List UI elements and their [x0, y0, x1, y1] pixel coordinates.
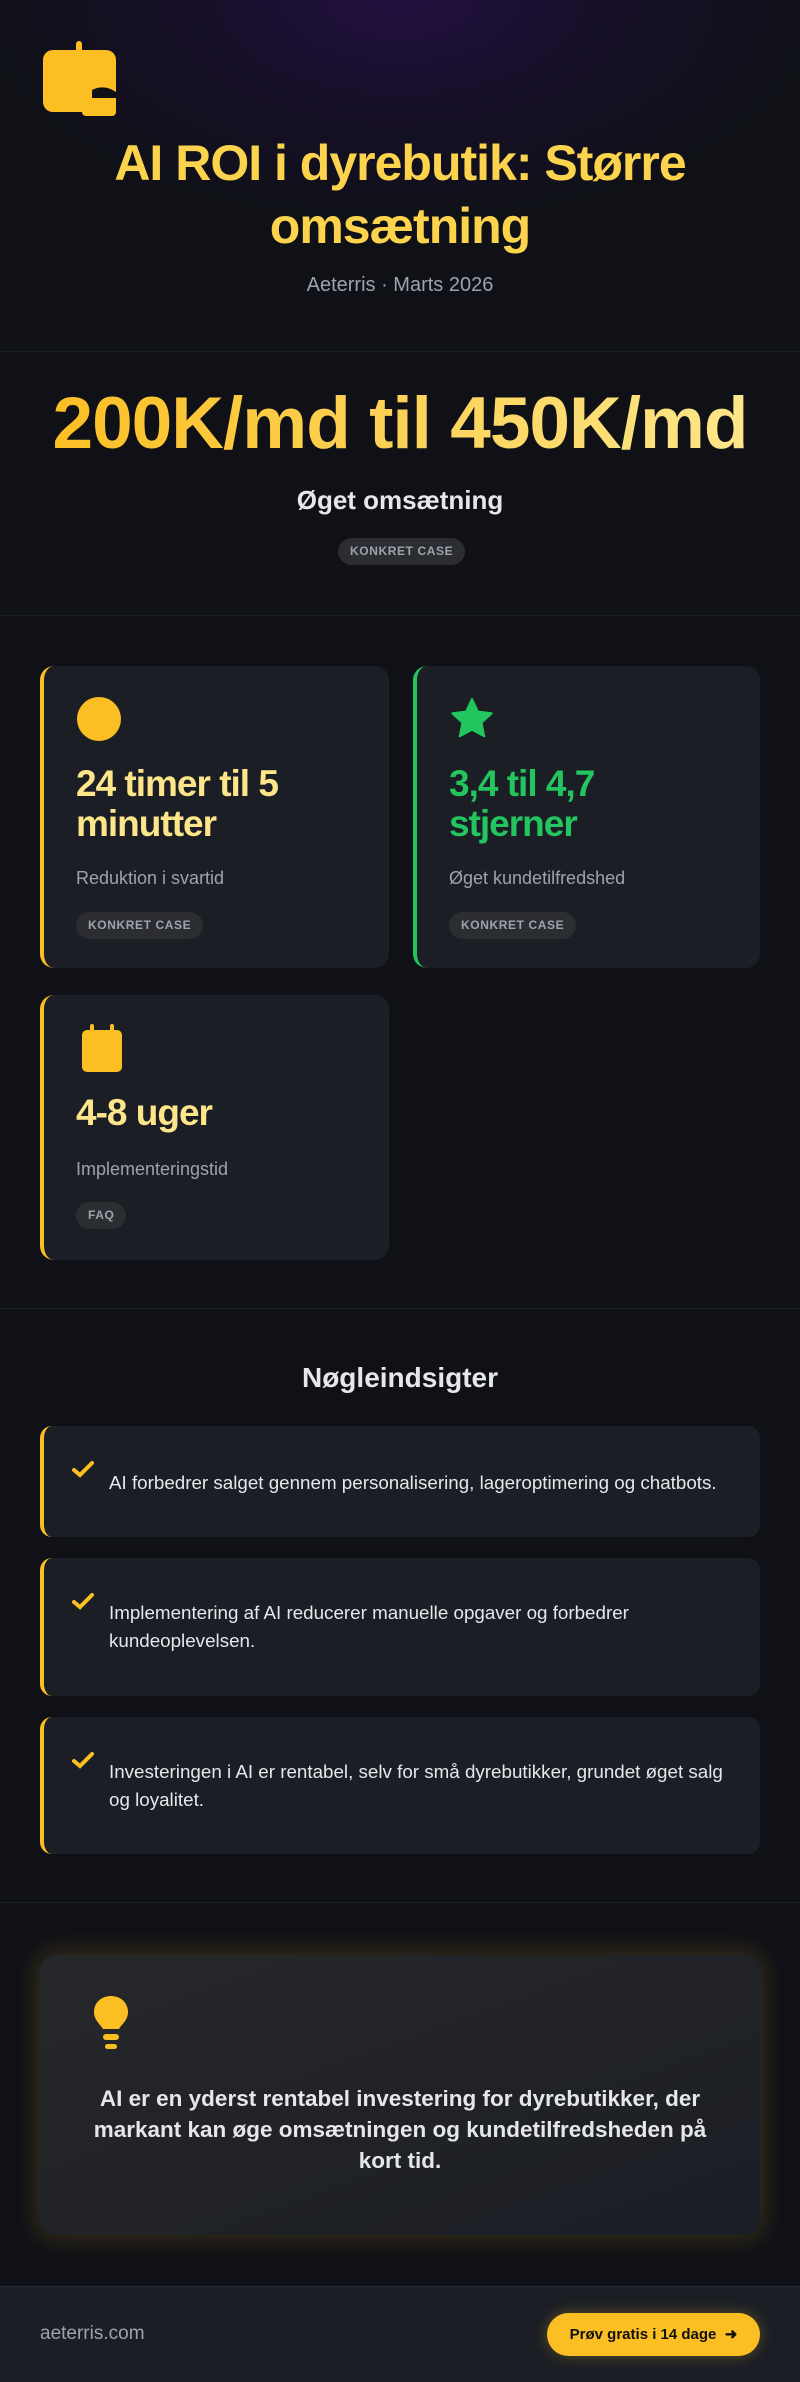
hero badge: [338, 538, 465, 565]
conclusion box: [40, 1955, 760, 2235]
card: response time: [40, 666, 389, 968]
value: [76, 763, 278, 844]
title: omsætning: [270, 198, 530, 254]
value: [449, 763, 594, 844]
badge: KONKRET CASE: [461, 918, 564, 932]
label: Reduktion i svartid: [76, 868, 224, 888]
insight 1: [40, 1426, 760, 1537]
insight 2: Implementering af AI reducerer manuelle opgaver og forbedrer kundeoplevelsen.: [109, 1602, 629, 1651]
card: satisfaction: [413, 666, 760, 968]
icon: check: [72, 1752, 94, 1769]
badge: KONKRET CASE: [88, 918, 191, 932]
conclusion text: AI er en yderst rentabel investering for dyrebutikker, der markant kan øge omsætningen og kundetilfredsheden på kort tid.: [94, 2086, 706, 2173]
insight 3: [40, 1717, 760, 1854]
heading: key insights: Nøgleindsigter: [302, 1362, 498, 1393]
value: 3,4 til 4,7: [449, 763, 594, 804]
hero badge: KONKRET CASE: [350, 544, 453, 558]
icon: check: [72, 1460, 94, 1478]
badge: FAQ: [88, 1208, 114, 1222]
hero stat: 200K/md til 450K/md: [52, 383, 748, 464]
icon: lightbulb: [94, 1996, 128, 2049]
badge: [449, 912, 576, 939]
footer url: aeterris.com: [40, 2323, 145, 2344]
card: implementation: [40, 995, 389, 1260]
value: 24 timer til 5: [76, 763, 278, 804]
icon: check: [72, 1592, 94, 1610]
badge: [76, 912, 203, 939]
title: [114, 135, 686, 254]
header background glow: [0, 0, 800, 350]
subtitle: Aeterris · Marts 2026: [307, 274, 493, 296]
badge: [76, 1202, 126, 1229]
hero label: Øget omsætning: [297, 485, 503, 515]
title: AI ROI i dyrebutik: Større: [114, 135, 686, 191]
value: 4-8 uger: [76, 1092, 212, 1133]
value: minutter: [76, 803, 216, 844]
insight 3: Investeringen i AI er rentabel, selv for små dyrebutikker, grundet øget salg og loyalitet.: [109, 1761, 723, 1810]
icon: circle: [77, 697, 121, 741]
CTA button: Prøv gratis i 14 dage ➜: [570, 2326, 737, 2343]
label: Implementeringstid: [76, 1159, 228, 1179]
insight 2: [40, 1558, 760, 1696]
footer: [0, 2286, 800, 2382]
icon: calendar: [82, 1024, 122, 1072]
icon: logo: [43, 41, 116, 116]
label: Øget kundetilfredshed: [449, 868, 625, 888]
value: stjerner: [449, 803, 577, 844]
icon: star: [451, 698, 493, 738]
insight 1: AI forbedrer salget gennem personalisering, lageroptimering og chatbots.: [109, 1472, 717, 1493]
CTA button: [547, 2313, 760, 2356]
